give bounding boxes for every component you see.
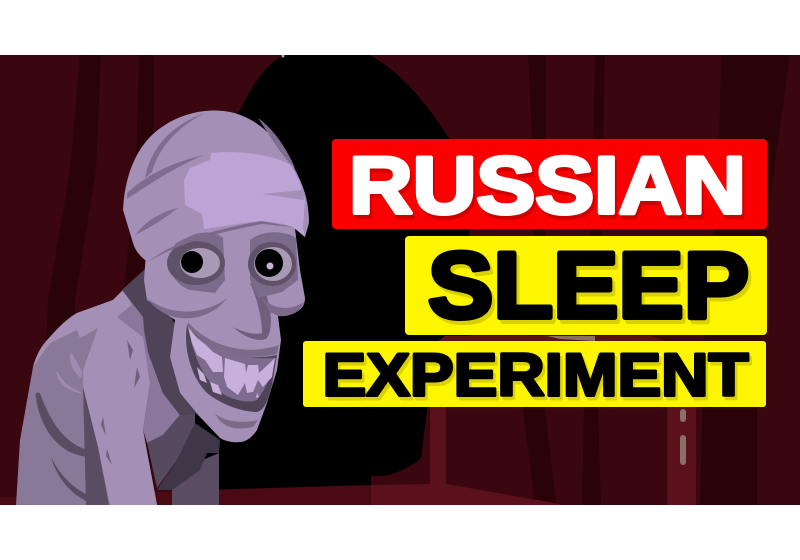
title: RUSSIAN: RUSSIAN (351, 145, 748, 235)
figure: emaciated purple man (16, 111, 309, 505)
title: SLEEP: SLEEP (428, 232, 749, 338)
title: SLEEP: SLEEP (431, 236, 752, 342)
mouth (186, 322, 279, 412)
dashed grey line (282, 54, 686, 465)
floor and door frame (371, 336, 696, 505)
eye sockets (170, 233, 225, 293)
smile and cheek lines (147, 298, 227, 318)
black arched doorway (170, 55, 470, 490)
bandage on head (123, 111, 309, 262)
head (123, 111, 309, 442)
title: EXPERIMENT: EXPERIMENT (325, 345, 751, 412)
title: EXPERIMENT: EXPERIMENT (322, 342, 748, 408)
body (16, 290, 195, 505)
right eye (248, 242, 296, 286)
left eye (167, 241, 225, 285)
face (144, 212, 305, 442)
legs (157, 423, 220, 505)
title: RUSSIAN: RUSSIAN (349, 141, 746, 231)
neck shadow (122, 268, 200, 417)
teeth (188, 327, 223, 372)
upper lip (187, 322, 279, 356)
chest (117, 305, 180, 443)
